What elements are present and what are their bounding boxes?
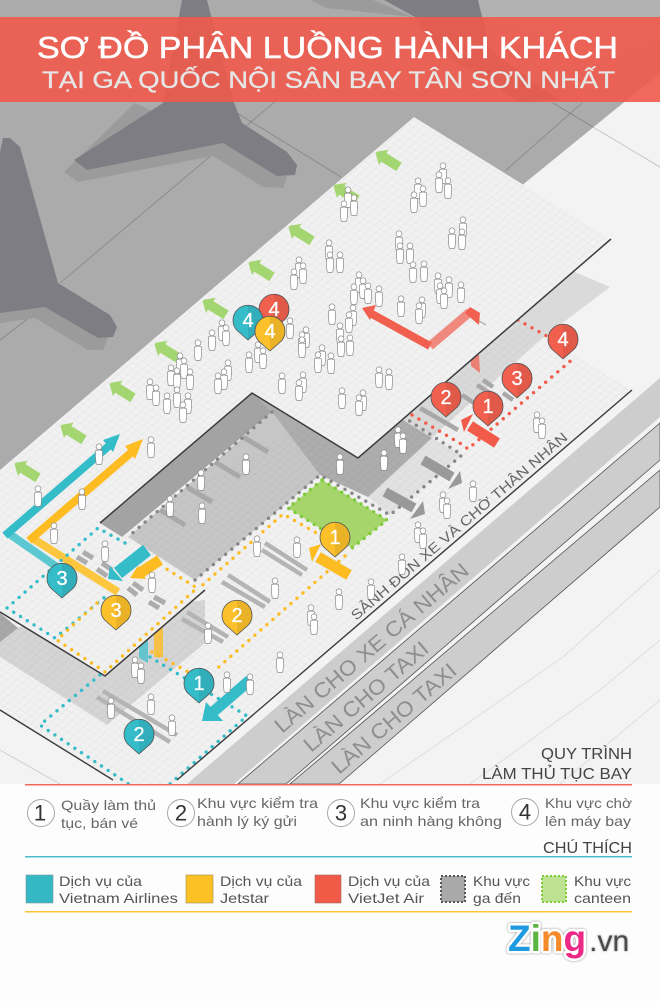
- title line 2: TẠI GA QUỐC NỘI SÂN BAY TÂN SƠN NHẤT: [42, 66, 615, 94]
- road lanes: [187, 378, 660, 784]
- passengers: [34, 163, 546, 735]
- pin teal 3: [47, 563, 77, 598]
- pin yellow 1: 1: [329, 527, 341, 549]
- logo: Zing.vn: Zing.vn: [508, 918, 629, 959]
- plane top centre: [74, 0, 297, 176]
- yellow dotted zone 2: [152, 514, 345, 673]
- pin red 3: [502, 363, 532, 398]
- vertical risers: [139, 355, 480, 663]
- teal route: [8, 434, 120, 567]
- dark shadow near arrival zone: [252, 393, 432, 497]
- legend: Jetstar: Dịch vụ của: [220, 873, 302, 889]
- legend: arrivals: ga đến: [473, 890, 521, 906]
- red arrow zone 1: [461, 414, 497, 443]
- yellow arrow zone 1: [309, 544, 349, 575]
- atrium wall: [100, 393, 272, 537]
- legend: canteen: [542, 873, 631, 906]
- jetstar screening rows: [182, 543, 307, 642]
- step 4: lên máy bay: [545, 813, 631, 829]
- pin red 4 upper: 4: [268, 299, 280, 321]
- shadow under left upper floor: [0, 600, 205, 725]
- legend: canteen: Khu vực: [574, 873, 631, 889]
- light zone right of arrival area: [368, 438, 462, 515]
- teal security arrow: [108, 550, 147, 581]
- step 1: 1: [34, 800, 46, 826]
- legend: Vietnam Airlines: Vietnam Airlines: [59, 890, 178, 906]
- legend: Vietnam Airlines: [26, 873, 178, 906]
- pin red 4: 4: [557, 329, 569, 351]
- grey exit arrows: [385, 460, 462, 519]
- legend: VietJet Air: Dịch vụ của: [348, 873, 430, 889]
- pin yellow 3: [101, 595, 131, 630]
- heading: check-in process: LÀM THỦ TỤC BAY: [482, 764, 632, 783]
- green dotted canteen border: [288, 480, 387, 548]
- legend: VietJet Air: [315, 873, 430, 906]
- step 2: Khu vực kiểm tra: [197, 795, 318, 811]
- tarmac markings: [0, 100, 660, 340]
- step 3: 3: [335, 800, 347, 826]
- pin red 4: [548, 324, 578, 359]
- pickup hall label: SẢNH ĐÓN XE VÀ CHỜ THÂN NHÂN: [348, 429, 571, 623]
- step 2: hành lý ký gửi: [197, 813, 297, 829]
- dark wedge under left upper floor: [0, 613, 18, 642]
- plane top right: [384, 0, 560, 102]
- heading: legend: CHÚ THÍCH: [543, 838, 632, 857]
- pin yellow 2: [222, 600, 252, 635]
- ground plate edges: [0, 390, 632, 780]
- legend: Vietnam Airlines: Dịch vụ của: [59, 873, 142, 889]
- plane left: [0, 138, 117, 338]
- pin yellow 1: [320, 522, 350, 557]
- pin red 2: 2: [440, 387, 452, 409]
- pin red 1: 1: [482, 396, 494, 418]
- step 1: Quầy làm thủ: [61, 797, 156, 813]
- vietnam airlines screening rows: [97, 691, 177, 742]
- pin yellow 3: 3: [110, 600, 122, 622]
- pin red 3: 3: [511, 368, 523, 390]
- pin teal 4: [233, 305, 263, 340]
- heading: check-in process: [482, 744, 632, 783]
- step 3: Khu vực kiểm tra: [360, 795, 480, 811]
- legend panel: [0, 784, 660, 1001]
- teal dotted zone 2: [40, 657, 247, 785]
- lane 1: [187, 378, 660, 784]
- shadow right of upper floor: [403, 270, 610, 438]
- pin teal 1: 1: [193, 673, 205, 695]
- lane label 3: LÀN CHO TAXI: [327, 659, 461, 779]
- airplane shadows: [0, 0, 560, 350]
- legend: arrivals: Khu vực: [473, 873, 530, 889]
- legend: VietJet Air: VietJet Air: [348, 890, 424, 906]
- yellow security arrow: [130, 560, 160, 579]
- map pins: [47, 294, 578, 754]
- upper floor plate: [0, 117, 611, 676]
- arrival zone desks: [160, 437, 268, 525]
- upper floor edges: [0, 239, 611, 676]
- pin teal 2: 2: [133, 724, 145, 746]
- plane top right shadow: [311, 0, 413, 17]
- pin teal 4: 4: [242, 310, 254, 332]
- arrival zone fill: [128, 412, 320, 580]
- teal arrow zone 1: [202, 680, 250, 721]
- canteen zone: [288, 480, 387, 548]
- lane 2: [238, 423, 660, 784]
- legend: Jetstar: Jetstar: [220, 890, 269, 906]
- plane top centre shadow: [64, 103, 287, 188]
- pin yellow 4: 4: [264, 321, 276, 343]
- step 3: [328, 795, 502, 829]
- step 1: tục, bán vé: [61, 815, 138, 831]
- step 4: [512, 795, 632, 829]
- yellow dotted zone 3: [57, 568, 197, 672]
- plane left shadow: [0, 307, 108, 350]
- pin teal 3: 3: [56, 568, 68, 590]
- title banner: [0, 17, 660, 102]
- faint ground lines: [380, 570, 660, 784]
- grey dotted arrival zone: [128, 412, 462, 580]
- pin red 1: [473, 391, 503, 426]
- heading: check-in process: QUY TRÌNH: [541, 744, 632, 763]
- legend: canteen: canteen: [574, 890, 631, 906]
- pin yellow 4: [255, 316, 285, 351]
- yellow route: [32, 439, 143, 592]
- lane label 2: LÀN CHO TAXI: [299, 637, 433, 757]
- teal dotted zone 3: [7, 528, 125, 638]
- red departure route: [362, 305, 486, 346]
- lane label 1: LÀN CHO XE CÁ NHÂN: [270, 559, 474, 738]
- security desks on upper floor: [77, 552, 165, 608]
- step 3: an ninh hàng không: [360, 813, 502, 829]
- pin teal 1: [184, 668, 214, 703]
- pin red 2: [431, 382, 461, 417]
- lane 3: [290, 470, 660, 784]
- step 4: 4: [519, 800, 531, 824]
- title line 1: SƠ ĐỒ PHÂN LUỒNG HÀNH KHÁCH: [37, 29, 618, 65]
- step 2: 2: [175, 800, 187, 826]
- vietjet rows: [420, 380, 513, 430]
- pin red 4 upper: [259, 294, 289, 329]
- green gate arrows: [10, 145, 404, 486]
- ground floor plate: [0, 270, 632, 785]
- red dotted zone: [412, 320, 575, 449]
- step 1: [28, 797, 156, 831]
- legend: arrivals: [441, 873, 530, 906]
- tarmac: [0, 0, 660, 630]
- legend: Jetstar: [186, 873, 302, 906]
- tarmac top right tint: [417, 0, 660, 60]
- pin yellow 2: 2: [231, 605, 243, 627]
- step 4: Khu vực chờ: [545, 795, 632, 811]
- pin teal 2: [124, 719, 154, 754]
- step 2: [168, 795, 318, 829]
